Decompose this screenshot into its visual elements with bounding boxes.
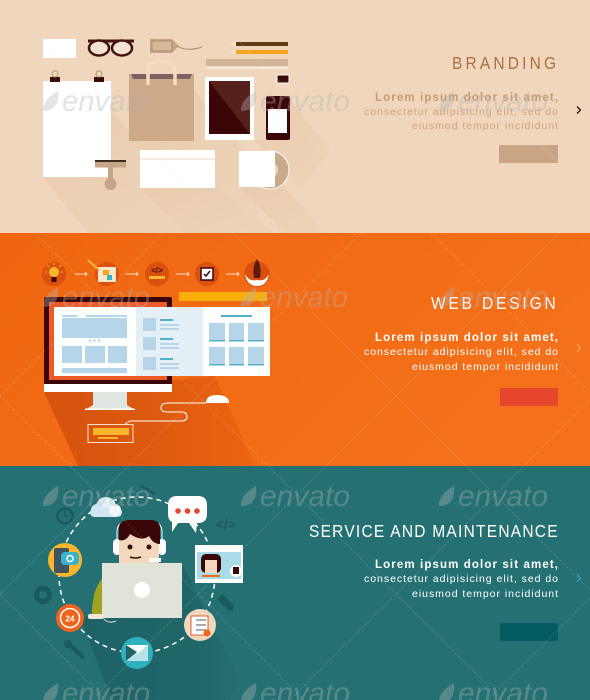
icon: mouse and cable	[125, 395, 229, 424]
watermarks: envato	[260, 85, 350, 118]
long shadow: operator	[80, 563, 240, 700]
dim background icons: </>	[216, 516, 236, 532]
text block: branding copy: eiusmod tempor incididunt	[412, 120, 558, 132]
watermarks: envato	[458, 85, 548, 118]
icon: business card	[43, 39, 76, 58]
icon: tablet	[205, 77, 254, 140]
icon: yellow ruler	[179, 292, 267, 301]
text block: service copy: Lorem ipsum dolor sit amet,	[375, 559, 558, 571]
text block: service copy: consectetur adipisicing elit, sed do	[364, 573, 558, 585]
figure: support operator	[88, 520, 182, 622]
heading: service and maintenance: SERVICE AND MAINTENANCE	[309, 521, 558, 541]
watermarks: envato	[458, 480, 548, 513]
icon: mobile settings	[48, 543, 82, 577]
headset	[113, 521, 166, 555]
text block: service copy: eiusmod tempor incididunt	[412, 588, 558, 600]
icon: stamp	[95, 160, 126, 190]
arm	[92, 579, 104, 615]
dim background icons	[36, 485, 236, 658]
text block: web design copy: Lorem ipsum dolor sit amet,	[375, 332, 558, 344]
text block: web design copy: consectetur adipisicing elit, sed do	[364, 346, 558, 358]
icon: chevron	[577, 344, 580, 352]
icon row: workflow	[42, 259, 270, 287]
icon: ruler	[206, 59, 288, 69]
text block: branding copy: Lorem ipsum dolor sit amet,	[375, 92, 558, 104]
text block: web design copy	[364, 332, 558, 373]
icon: pencils	[230, 42, 288, 54]
text block: branding copy: consectetur adipisicing elit, sed do	[364, 106, 558, 118]
button: web design	[500, 388, 558, 406]
heading: web design: WEB DESIGN	[431, 293, 556, 313]
hand and mouse	[88, 614, 104, 619]
watermarks: envato	[62, 480, 150, 513]
button: service	[500, 623, 558, 641]
icon: chevron	[577, 106, 580, 114]
icon row: workflow: </>	[151, 266, 163, 275]
long shadows: stationery	[43, 90, 330, 233]
text block: web design copy: eiusmod tempor incididunt	[412, 361, 558, 373]
face	[119, 530, 159, 566]
icon: glasses	[88, 40, 134, 56]
panel: web design	[0, 233, 590, 466]
hair	[119, 520, 160, 544]
icon: 24 hours	[56, 604, 84, 632]
wireframe: list page	[143, 318, 179, 370]
watermarks: envato	[260, 281, 348, 314]
heading: branding: BRANDING	[452, 53, 556, 73]
icon: cloud	[90, 497, 122, 517]
watermarks	[43, 85, 548, 700]
watermarks: envato	[260, 480, 350, 513]
watermarks: envato	[458, 281, 548, 314]
icon: keyboard	[88, 424, 133, 442]
panel: service and maintenance	[0, 466, 590, 700]
icon: small box	[277, 75, 289, 83]
icon: speech bubble	[168, 496, 207, 533]
text block: service copy	[364, 559, 558, 600]
icon: shopping bag	[129, 61, 194, 141]
dashed service ring	[59, 497, 215, 653]
watermarks: envato	[62, 85, 150, 118]
watermarks: envato	[62, 281, 150, 314]
icon: tag	[150, 39, 202, 53]
icon: cd and sleeve	[239, 151, 289, 189]
wireframe: home page	[62, 315, 127, 373]
icon: email	[121, 637, 153, 669]
icon: 24 hours: 24	[66, 614, 75, 624]
icon: phone	[266, 96, 290, 140]
laptop	[102, 563, 182, 618]
icon: paper with clips	[43, 71, 111, 177]
website layouts panel	[54, 307, 270, 376]
icon: envelope	[140, 150, 215, 188]
button: branding	[499, 145, 558, 163]
panel: branding	[0, 0, 590, 233]
text block: branding copy	[364, 92, 558, 132]
long shadow: monitor	[44, 376, 255, 466]
wireframe: gallery page	[209, 315, 264, 366]
icon: monitor	[44, 297, 172, 410]
icon: checklist	[184, 609, 216, 641]
icon: chevron	[577, 574, 580, 582]
icon: video call window	[195, 545, 243, 583]
